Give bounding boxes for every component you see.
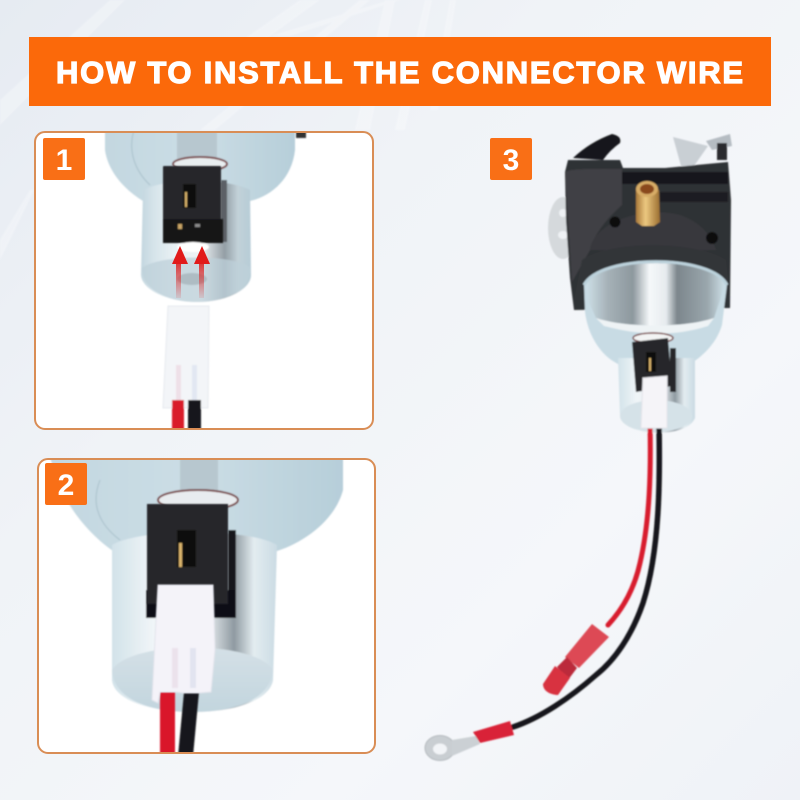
connector socket [147, 504, 228, 604]
panel: step 2 [38, 458, 375, 756]
badge 2 [45, 463, 87, 505]
brass fitting [636, 181, 660, 226]
ring terminal [425, 721, 514, 760]
carburetor body [565, 160, 731, 310]
mounting holes [610, 216, 718, 244]
red spade terminal [543, 624, 609, 695]
connector socket [632, 338, 672, 392]
assembled carburetor with solenoid [425, 134, 732, 760]
panel: step 1 [35, 130, 373, 432]
fuel bowl [584, 268, 727, 364]
title banner [29, 37, 771, 106]
levers [573, 134, 732, 166]
wires [160, 692, 199, 756]
connector socket [163, 166, 223, 252]
mounting disc [548, 197, 578, 259]
badge 3: 3 [503, 144, 519, 177]
solenoid, step 3 [618, 333, 695, 433]
wires to terminals [513, 425, 659, 727]
white plug and wires [163, 306, 209, 432]
solenoid with plugged connector, step 2 [50, 458, 343, 756]
badge 3 [490, 138, 532, 180]
badge 2: 2 [58, 469, 74, 502]
white plug [152, 585, 215, 703]
arrows pointing to socket [172, 246, 210, 298]
title: HOW TO INSTALL THE CONNECTOR WIRE [56, 55, 743, 90]
solenoid with socket, step 1 [105, 130, 306, 432]
badge 1 [43, 138, 85, 180]
badge 1: 1 [56, 144, 72, 177]
white plug [641, 376, 667, 428]
